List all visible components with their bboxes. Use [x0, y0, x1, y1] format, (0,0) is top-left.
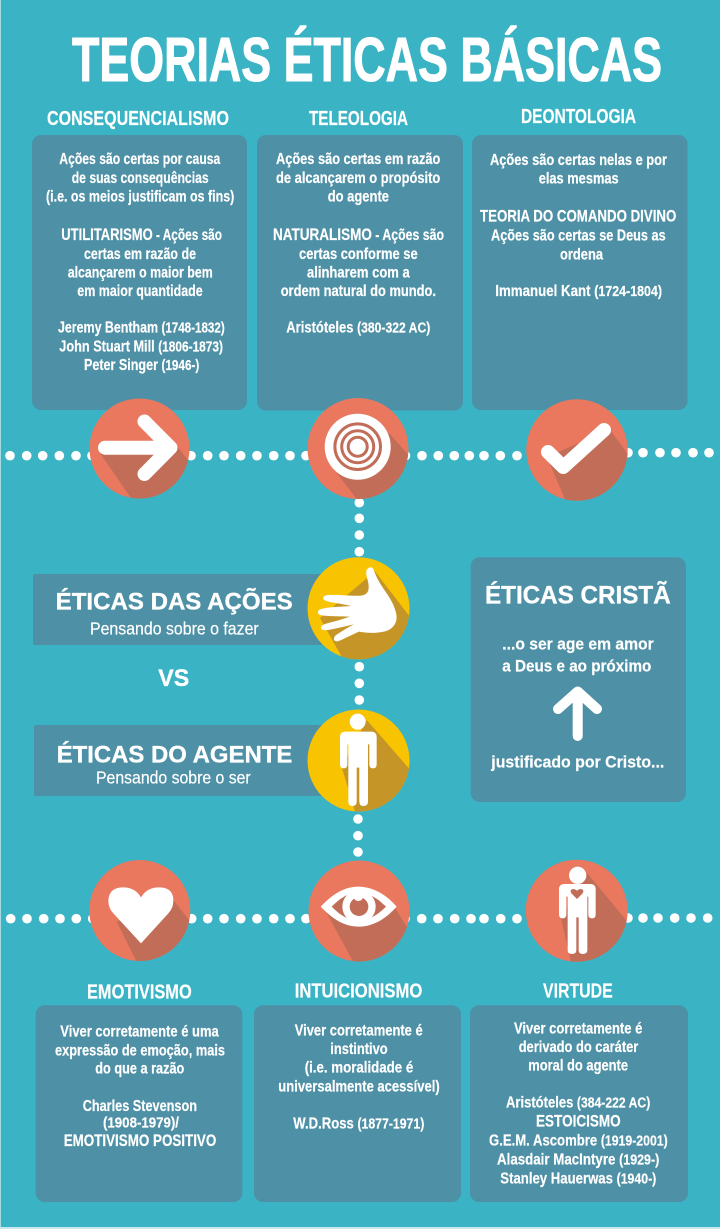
text block: consequencialismo: de suas consequências	[72, 170, 209, 187]
arrow: up	[558, 692, 597, 736]
text block: intuicionismo: W.D.Ross (1877-1971)	[293, 1115, 424, 1132]
icon: hand	[308, 557, 415, 665]
icon: person	[308, 710, 415, 815]
banner heading: ÉTICAS DAS AÇÕES	[56, 587, 293, 615]
text block: intuicionismo: instintivo	[330, 1041, 388, 1058]
text block: emotivismo: do que a razão	[95, 1061, 184, 1078]
text block: virtude: Alasdair MacIntyre (1929-)	[497, 1152, 659, 1169]
panel: virtude	[470, 980, 688, 1202]
text block: deontologia: elas mesmas	[539, 170, 619, 188]
icon: target	[308, 398, 408, 499]
panel: consequencialismo	[32, 108, 247, 410]
text block: deontologia: Immanuel Kant (1724-1804)	[495, 283, 662, 300]
text block: virtude: moral do agente	[528, 1058, 628, 1075]
card: intuicionismo	[254, 1005, 461, 1202]
heading: deontologia: DEONTOLOGIA	[521, 106, 636, 128]
text block: teleologia: do agente	[328, 189, 389, 206]
heading: consequencialismo: CONSEQUENCIALISMO	[47, 108, 229, 130]
panel: intuicionismo	[254, 981, 461, 1202]
text block: teleologia: ordem natural do mundo.	[281, 283, 436, 300]
text block: virtude: G.E.M. Ascombre (1919-2001)	[489, 1133, 668, 1150]
panel: emotivismo	[36, 981, 242, 1202]
text: justificado por cristo: justificado por Cristo...	[490, 754, 664, 772]
heading: intuicionismo: INTUICIONISMO	[295, 981, 422, 1003]
text block: emotivismo: EMOTIVISMO POSITIVO	[64, 1131, 216, 1150]
text block: teleologia: certas conforme se	[299, 246, 418, 263]
heading: teleologia: TELEOLOGIA	[309, 108, 408, 130]
dotted line: vertical	[353, 498, 364, 857]
banner: éticas do agente	[34, 725, 334, 796]
text block: consequencialismo: John Stuart Mill (1806-1873)	[59, 338, 223, 355]
text block: virtude: Stanley Hauerwas (1940-)	[500, 1170, 656, 1187]
banner heading: ÉTICAS DO AGENTE	[57, 740, 292, 768]
text block: teleologia: Aristóteles (380-322 AC)	[286, 320, 430, 337]
text block: emotivismo: expressão de emoção, mais	[55, 1042, 225, 1059]
icon: heart	[89, 860, 190, 961]
card: virtude	[470, 1005, 688, 1202]
dotted line: bottom row	[6, 913, 712, 924]
vs label: VS	[158, 665, 189, 692]
text block: consequencialismo: UTILITARISMO - Ações são	[61, 225, 222, 244]
card: consequencialismo	[32, 135, 247, 410]
card: teleologia	[257, 135, 463, 410]
heading: éticas cristã: ÉTICAS CRISTÃ	[485, 579, 671, 609]
text block: intuicionismo	[278, 1023, 440, 1132]
icon: arrow	[90, 398, 190, 498]
text block: teleologia: Ações são certas em razão	[276, 151, 440, 168]
text: a Deus e ao próximo: a Deus e ao próximo	[502, 658, 651, 676]
text block: consequencialismo: Jeremy Bentham (1748-1832)	[58, 320, 225, 337]
text block: virtude	[489, 1020, 668, 1187]
text block: teleologia: NATURALISMO - Ações são	[273, 225, 444, 244]
card: deontologia	[472, 135, 688, 410]
heading: emotivismo: EMOTIVISMO	[87, 981, 192, 1003]
panel: deontologia	[472, 106, 688, 410]
text block: consequencialismo: em maior quantidade	[77, 283, 203, 300]
text: o ser age em amor: ...o ser age em amor	[502, 635, 654, 653]
banner subtitle: Pensando sobre o ser	[96, 767, 251, 787]
text block: emotivismo: Viver corretamente é uma	[60, 1024, 219, 1041]
text block: deontologia: ordena	[560, 246, 603, 263]
text block: consequencialismo: (i.e. os meios justificam os fins)	[46, 189, 234, 206]
text block: intuicionismo: Viver corretamente é	[295, 1023, 423, 1040]
text block: intuicionismo: universalmente acessível)	[278, 1078, 440, 1095]
icon: check mark	[526, 399, 628, 501]
text block: teleologia: alinharem com a	[307, 264, 410, 282]
text block: consequencialismo: Peter Singer (1946-)	[84, 357, 199, 374]
dotted line: top row	[5, 448, 714, 461]
text block: virtude: ESTOICISMO	[536, 1112, 621, 1131]
text block: deontologia: Ações são certas se Deus as	[491, 228, 666, 245]
text block: virtude: Viver corretamente é	[514, 1020, 643, 1037]
text block: consequencialismo: Ações são certas por causa	[59, 151, 221, 168]
text block: emotivismo: Charles Stevenson	[83, 1098, 197, 1115]
heading: virtude: VIRTUDE	[543, 980, 613, 1002]
banner subtitle: Pensando sobre o fazer	[90, 618, 259, 638]
panel: teleologia	[257, 108, 463, 410]
banner: éticas das ações	[33, 574, 333, 645]
panel: éticas cristã	[471, 557, 686, 802]
text block: intuicionismo: (i.e. moralidade é	[305, 1060, 414, 1077]
text block: teleologia	[273, 151, 444, 337]
text block: emotivismo	[55, 1024, 225, 1150]
card: emotivismo	[36, 1005, 242, 1202]
text block: teleologia: de alcançarem o propósito	[276, 170, 440, 187]
text block: deontologia	[480, 152, 676, 300]
text block: consequencialismo: certas em razão de	[84, 246, 196, 263]
text block: consequencialismo: alcançarem o maior bem	[68, 264, 213, 282]
text block: emotivismo: (1908-1979)/	[103, 1115, 179, 1131]
text block: deontologia: Ações são certas nelas e por	[490, 152, 667, 169]
text block: consequencialismo	[46, 151, 234, 374]
text block: virtude: Aristóteles (384-222 AC)	[506, 1095, 650, 1112]
icon: eye	[308, 860, 410, 962]
text block: virtude: derivado do caráter	[519, 1039, 638, 1056]
icon: person with heart	[526, 860, 628, 962]
